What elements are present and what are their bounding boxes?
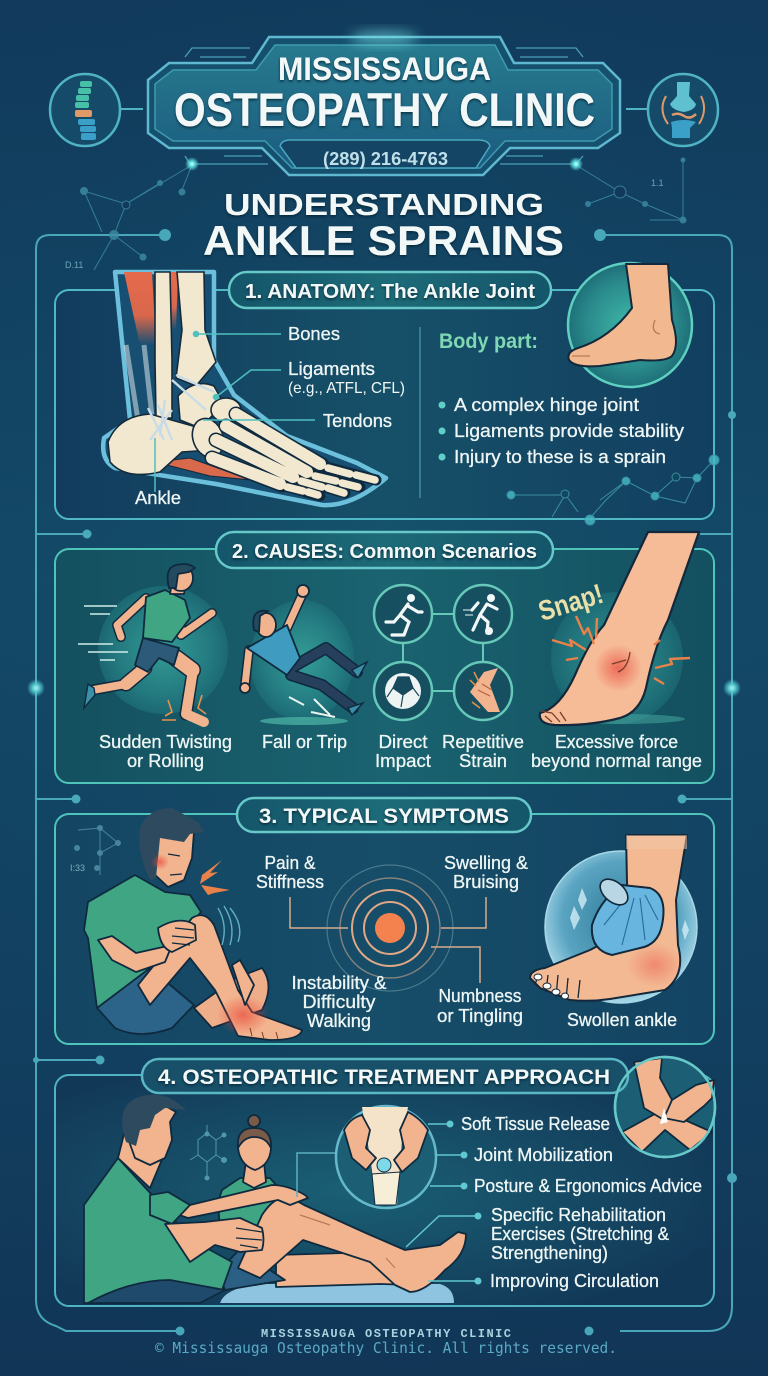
illustration: leg with snap: Snap!	[535, 578, 607, 627]
icon: hands circle	[615, 1057, 715, 1157]
icon: knee joint	[626, 74, 718, 146]
cause labels: Strain	[459, 751, 507, 771]
bone labels: Bones	[288, 324, 340, 344]
heading pill: causes	[216, 532, 553, 568]
heading pill: anatomy: 1. ANATOMY: The Ankle Joint	[245, 281, 535, 303]
icon: foot circle	[568, 263, 692, 387]
bullets	[438, 395, 684, 467]
bullets: A complex hinge joint	[454, 395, 639, 415]
small decorative labels	[65, 178, 664, 270]
clinic name: OSTEOPATHY CLINIC	[174, 83, 595, 136]
bone labels: (e.g., ATFL, CFL)	[288, 380, 405, 397]
clinic name	[174, 51, 595, 136]
illustration: ankle skeleton	[103, 272, 386, 505]
illustration: treatment table	[220, 1284, 454, 1303]
network decoration right	[576, 158, 686, 223]
symptom labels: Instability &	[292, 973, 386, 993]
cause labels: beyond normal range	[531, 751, 702, 771]
heading pill: treatment: 4. OSTEOPATHIC TREATMENT APPROACH	[158, 1066, 610, 1089]
cause labels: or Rolling	[127, 751, 204, 771]
small decorative labels: 1.1	[651, 178, 664, 188]
molecule decoration	[190, 1125, 226, 1180]
symptom labels: Bruising	[453, 872, 519, 892]
icon: spine	[50, 74, 143, 146]
symptom labels: Numbness	[438, 986, 522, 1006]
treatment labels: Specific Rehabilitation	[491, 1205, 666, 1225]
cause labels: Impact	[375, 751, 431, 771]
outer circuit frame	[27, 229, 741, 1336]
treatment labels	[461, 1114, 702, 1291]
panel: treatment	[55, 1057, 715, 1306]
bone labels: Ligaments	[288, 359, 375, 379]
heading pill: treatment	[142, 1059, 628, 1093]
panel: symptoms	[55, 798, 714, 1044]
footer: © Mississauga Osteopathy Clinic. All rights reserved.	[155, 1339, 617, 1357]
callout lines	[155, 332, 315, 492]
divider	[419, 327, 421, 498]
heading pill: symptoms	[237, 798, 531, 832]
small decorative labels: D.11	[65, 260, 83, 270]
footer	[155, 1327, 617, 1357]
treatment labels: Strengthening)	[491, 1243, 608, 1263]
panel: anatomy	[55, 263, 719, 525]
treatment callout lines	[406, 1120, 482, 1284]
icon: strained ankle	[454, 662, 512, 720]
illustration: legs	[218, 1197, 466, 1292]
panel: symptoms: I:33	[70, 863, 85, 873]
treatment labels: Soft Tissue Release	[461, 1114, 610, 1134]
main title	[203, 187, 564, 264]
bone labels: Ankle	[135, 488, 181, 508]
network decoration	[507, 455, 719, 525]
treatment labels: Exercises (Stretching &	[491, 1224, 669, 1244]
treatment labels: Posture & Ergonomics Advice	[474, 1176, 702, 1196]
illustration: man holding leg	[84, 808, 302, 1040]
illustration: therapist	[84, 1095, 308, 1303]
hands circle border restore	[615, 1057, 715, 1157]
treatment labels: Improving Circulation	[490, 1271, 659, 1291]
network decoration left	[80, 165, 192, 270]
cause labels: Sudden Twisting	[99, 732, 232, 752]
symptom labels: Walking	[307, 1011, 371, 1031]
heading pill: causes: 2. CAUSES: Common Scenarios	[232, 541, 537, 563]
illustration: runner	[78, 564, 228, 722]
illustration: ice pack on ankle	[530, 835, 697, 1003]
bone labels	[135, 324, 405, 508]
icon: sport	[454, 585, 512, 643]
header plaque	[148, 31, 620, 175]
cause labels: Excessive force	[555, 732, 678, 752]
symptom labels: Pain &	[264, 853, 316, 873]
cause labels: Fall or Trip	[262, 732, 347, 752]
symptom labels: Swollen ankle	[567, 1010, 677, 1030]
main title: ANKLE SPRAINS	[203, 217, 564, 264]
network decoration	[74, 826, 120, 875]
bullets: Ligaments provide stability	[454, 421, 684, 441]
treatment labels: Joint Mobilization	[474, 1145, 613, 1165]
illustration: fall	[240, 585, 367, 725]
illustration: patient	[218, 1115, 285, 1230]
symptom labels: or Tingling	[437, 1006, 523, 1026]
symptom labels	[256, 853, 677, 1031]
footer: MISSISSAUGA OSTEOPATHY CLINIC	[261, 1327, 511, 1341]
clinic name: MISSISSAUGA	[278, 51, 491, 87]
heading pill: anatomy	[222, 272, 570, 308]
panel: causes	[55, 532, 714, 783]
connector lines	[290, 897, 486, 983]
main title: UNDERSTANDING	[224, 187, 544, 222]
symptom labels: Stiffness	[256, 872, 324, 892]
icons: cause network	[374, 585, 512, 720]
symptom labels: Difficulty	[302, 992, 376, 1012]
icon: ball	[374, 662, 432, 720]
heading pill: symptoms: 3. TYPICAL SYMPTOMS	[259, 805, 509, 828]
icon: running	[374, 585, 432, 643]
symptom labels: Swelling &	[444, 853, 528, 873]
cause labels: Repetitive	[442, 732, 524, 752]
illustration: leg with snap	[535, 532, 699, 725]
icon: knee mobilization circle	[297, 1106, 436, 1208]
phone number: (289) 216-4763	[323, 149, 448, 169]
bone labels: Tendons	[323, 411, 392, 431]
cause labels	[99, 732, 702, 771]
target rings	[327, 865, 453, 991]
bullets: Injury to these is a sprain	[454, 447, 666, 467]
body part heading: Body part:	[439, 330, 538, 353]
cause labels: Direct	[378, 732, 428, 752]
